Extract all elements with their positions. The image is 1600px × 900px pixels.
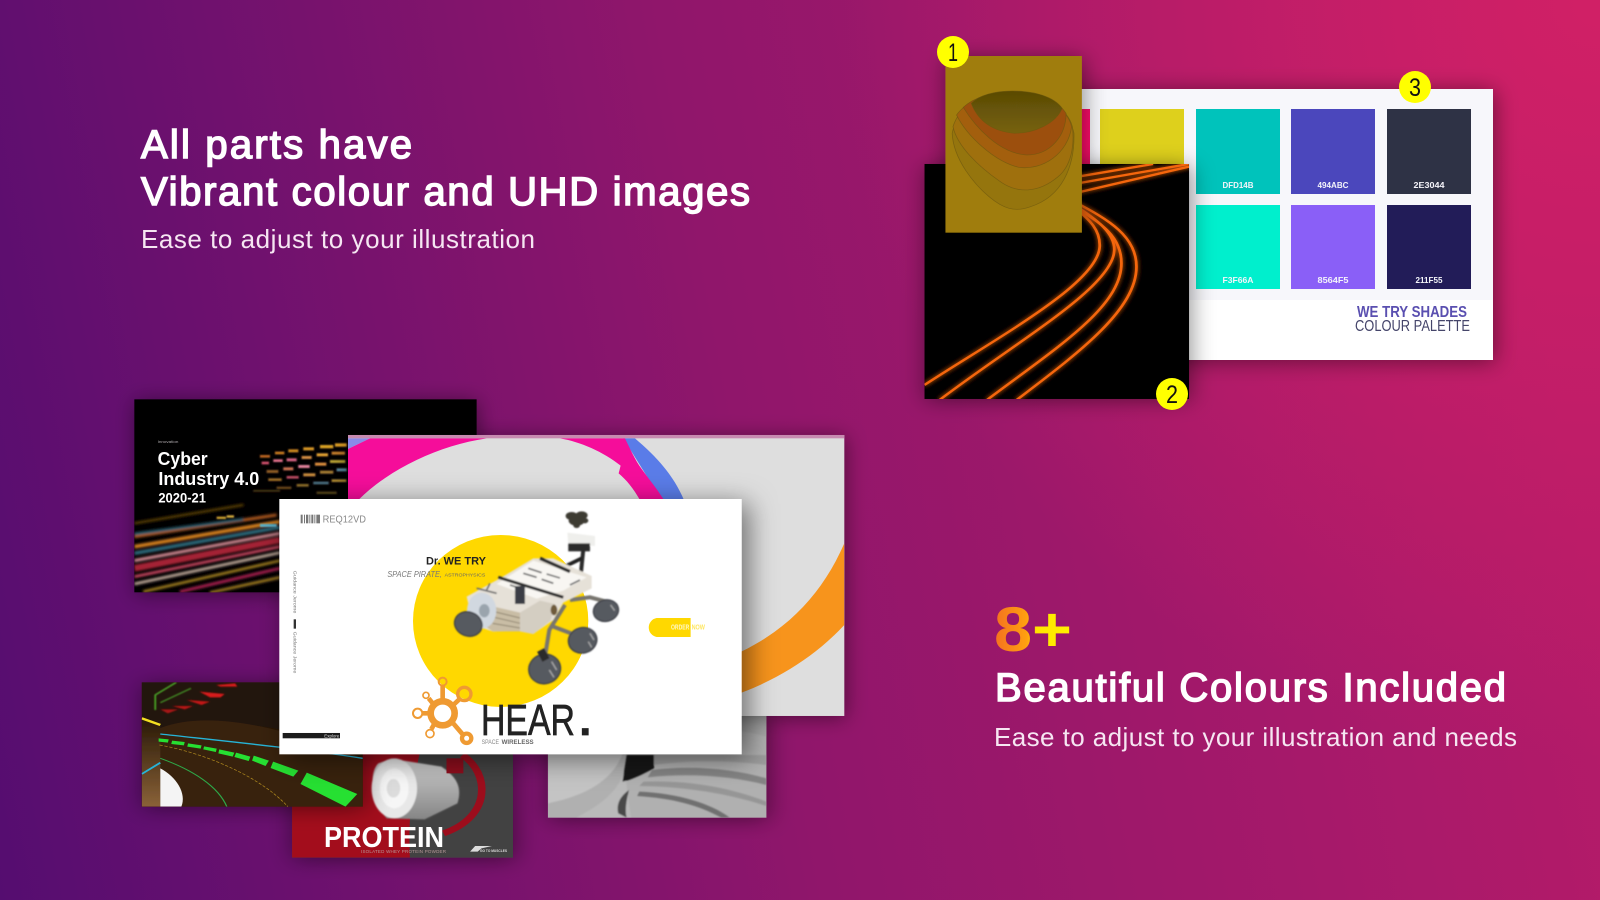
order now button: ORDER xyxy=(671,625,689,632)
hear wordmark xyxy=(484,704,589,736)
palette title: WE TRY SHADES xyxy=(1357,304,1467,321)
slide text: protein: GO TO MUSCLES xyxy=(480,848,507,853)
heading: beautiful colours included: Beautiful Colours Included xyxy=(995,666,1506,710)
name and role xyxy=(388,557,486,578)
badge 2 xyxy=(1156,378,1188,410)
wordmark tagline: SPACE xyxy=(482,739,499,746)
wordmark tagline: WIRELESS xyxy=(502,739,534,746)
slide: hear rover poster xyxy=(279,499,742,754)
molecule logo xyxy=(413,678,471,743)
name and role: SPACE PIRATE, xyxy=(387,570,442,579)
hear wordmark: HEAR xyxy=(481,697,575,745)
subheading: illustration and needs: Ease to adjust to your illustration and needs xyxy=(994,722,1517,752)
order now button: NOW xyxy=(692,625,705,632)
palette title xyxy=(1355,304,1470,335)
pink band xyxy=(348,438,664,500)
vertical caption: Guidance Jerome xyxy=(291,632,297,674)
slide: abstract grey swirl xyxy=(548,713,766,818)
palette swatches: F3F66A xyxy=(1222,275,1254,285)
barcode and code: REQ12VD xyxy=(323,515,366,526)
badge 2: 2 xyxy=(1166,381,1178,409)
badge 3: 3 xyxy=(1409,74,1421,102)
palette title: COLOUR PALETTE xyxy=(1355,318,1470,335)
name and role: ASTROPHYSICS xyxy=(445,573,485,578)
panel: colour palette card xyxy=(1060,89,1493,360)
red ring xyxy=(444,755,482,833)
heading: vibrant colour and UHD images xyxy=(141,123,750,214)
slide: neon tunnel road xyxy=(142,682,363,807)
explore bar: Explore xyxy=(324,733,340,738)
heading: vibrant colour and UHD images: All parts have xyxy=(141,123,412,167)
order now button xyxy=(649,618,705,637)
badge 1: 1 xyxy=(948,39,958,67)
name and role: Dr. WE TRY xyxy=(426,555,486,567)
red chevrons and green guide lines xyxy=(155,682,237,713)
explore bar xyxy=(283,733,340,738)
blue band xyxy=(623,438,684,500)
vertical caption: Guidance Jerome xyxy=(291,571,297,614)
palette swatches: 2E3044 xyxy=(1414,180,1445,190)
palette swatches: 494ABC xyxy=(1318,180,1348,190)
green route dashes xyxy=(159,738,357,807)
slide text: protein: PROTEIN xyxy=(324,822,444,854)
image: neon road lines on black xyxy=(925,164,1189,400)
palette swatches: 8564F5 xyxy=(1318,275,1349,285)
cover text: Innovation xyxy=(158,440,178,444)
silver can xyxy=(372,758,459,819)
heading: vibrant colour and UHD images: Vibrant colour and UHD images xyxy=(141,170,750,214)
wordmark tagline xyxy=(482,740,534,744)
barcode and code xyxy=(301,515,366,526)
yellow light xyxy=(142,718,160,725)
slide: colourful arcs on grey xyxy=(348,434,844,716)
cover text xyxy=(158,440,259,505)
cover text: Cyber xyxy=(158,448,208,469)
hear wordmark: . xyxy=(579,697,591,745)
cover text: Industry 4.0 xyxy=(158,468,259,489)
white curve xyxy=(160,768,183,807)
image: layered ochre paper cut xyxy=(945,56,1082,233)
subheading: ease to adjust: Ease to adjust to your illustration xyxy=(141,224,535,254)
palette swatches: 211F55 xyxy=(1416,275,1443,285)
badge 3 xyxy=(1399,71,1431,103)
slide text: protein: ISOLATED WHEY PROTEIN POWDER xyxy=(361,849,447,854)
badge 1 xyxy=(937,36,969,68)
palette swatches xyxy=(1060,109,1471,289)
vertical caption xyxy=(294,570,297,674)
city bokeh lights xyxy=(217,443,347,527)
slide: protein can xyxy=(292,750,513,858)
stat: 8+: 8+ xyxy=(994,595,1072,665)
orange band xyxy=(740,543,844,693)
light streaks xyxy=(134,505,280,593)
yellow circle xyxy=(413,535,588,707)
palette swatches: DFD14B xyxy=(1222,180,1254,190)
cover text: 2020-21 xyxy=(158,490,206,505)
cyan lane markers xyxy=(160,734,363,758)
rover illustration xyxy=(451,511,621,687)
slide: cyber industry xyxy=(134,399,477,593)
